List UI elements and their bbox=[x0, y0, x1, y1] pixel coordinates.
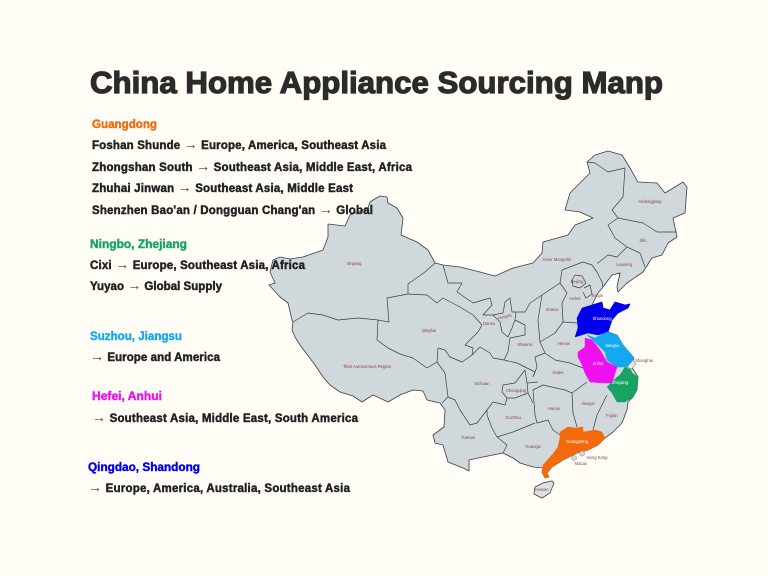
section: Ningbo, Zhejiang bbox=[90, 239, 306, 293]
province labels: Hunan bbox=[548, 406, 561, 411]
section: Qingdao, Shandong: Qingdao, Shandong bbox=[88, 462, 200, 474]
province labels: Gansu bbox=[483, 321, 496, 326]
province labels: Hong Kong bbox=[587, 455, 608, 460]
section: Suzhou, Jiangsu: Suzhou, Jiangsu bbox=[90, 331, 182, 343]
province labels: Fujian bbox=[606, 413, 618, 418]
province labels: Shandong bbox=[592, 316, 612, 321]
section: Guangdong: Zhuhai Jinwan → Southeast Asia, Middle East bbox=[92, 179, 353, 195]
section: Guangdong bbox=[92, 119, 413, 217]
province labels: Shanxi bbox=[546, 307, 558, 312]
province labels: Jiangxi bbox=[581, 401, 595, 406]
province labels: Heilongjiang bbox=[638, 199, 662, 204]
section: Guangdong: Foshan Shunde → Europe, America, Southeast Asia bbox=[92, 136, 387, 152]
province labels: Guangxi bbox=[525, 444, 541, 449]
province labels: Hainan bbox=[535, 487, 549, 492]
province: Jiangsu bbox=[587, 332, 634, 367]
section: Ningbo, Zhejiang: Cixi → Europe, Southeast Asia, Africa bbox=[90, 256, 306, 272]
section: Qingdao, Shandong: → Europe, America, Australia, Southeast Asia bbox=[88, 479, 351, 495]
province labels: Tibet Autonomous Region bbox=[343, 364, 392, 369]
section: Hefei, Anhui: Hefei, Anhui bbox=[92, 391, 162, 403]
province labels bbox=[343, 199, 662, 492]
province labels: Tianjin bbox=[591, 293, 604, 298]
province labels: Shaanxi bbox=[517, 342, 533, 347]
province labels: Guizhou bbox=[505, 415, 521, 420]
province labels: Jilin bbox=[639, 238, 647, 243]
province: Shandong bbox=[575, 302, 630, 337]
section: Qingdao, Shandong bbox=[88, 462, 351, 495]
province labels: Macau bbox=[575, 461, 588, 466]
title: China Home Appliance Sourcing Manp bbox=[90, 65, 663, 100]
section: Suzhou, Jiangsu: → Europe and America bbox=[90, 348, 221, 364]
province labels: Ningxia bbox=[497, 312, 513, 321]
province labels: Sichuan bbox=[474, 381, 490, 386]
province borders bbox=[293, 162, 677, 453]
Hainan bbox=[534, 481, 554, 498]
Shanghai bbox=[627, 360, 636, 369]
province: Zhejiang bbox=[607, 367, 638, 402]
province labels: Qinghai bbox=[422, 328, 436, 333]
province labels: Hebei bbox=[570, 296, 581, 301]
map of China bbox=[269, 151, 687, 498]
section: Ningbo, Zhejiang: Ningbo, Zhejiang bbox=[90, 239, 187, 251]
province labels: Hubei bbox=[553, 370, 564, 375]
section: Guangdong: Shenzhen Bao'an / Dongguan Chang'an → Global bbox=[92, 201, 373, 217]
province labels: Inner Mongolia bbox=[543, 257, 572, 262]
country outline bbox=[269, 151, 687, 478]
province labels: Beijing bbox=[571, 279, 584, 284]
section: Hefei, Anhui: → Southeast Asia, Middle East, South America bbox=[92, 409, 359, 425]
province: Anhui bbox=[578, 338, 617, 383]
province labels: Jiangsu bbox=[605, 343, 620, 348]
section: Ningbo, Zhejiang: Yuyao → Global Supply bbox=[90, 277, 223, 293]
province: Guangdong bbox=[542, 427, 605, 478]
Hong Kong bbox=[579, 451, 585, 456]
section: Suzhou, Jiangsu bbox=[90, 331, 221, 364]
Macau bbox=[572, 456, 576, 460]
section: Guangdong: Zhongshan South → Southeast Asia, Middle East, Africa bbox=[92, 158, 413, 174]
province labels: Yunnan bbox=[461, 435, 476, 440]
province labels: Shanghai bbox=[635, 358, 653, 363]
section: Hefei, Anhui bbox=[92, 391, 359, 425]
province labels: Guangdong bbox=[566, 439, 589, 444]
province labels: Anhui bbox=[593, 361, 603, 366]
province labels: Xinjiang bbox=[347, 261, 362, 266]
section: Guangdong: Guangdong bbox=[92, 119, 157, 131]
province labels: Zhejiang bbox=[612, 380, 629, 385]
province labels: Henan bbox=[558, 341, 571, 346]
province labels: Liaoning bbox=[616, 262, 633, 267]
province labels: Chongqing bbox=[506, 388, 527, 393]
